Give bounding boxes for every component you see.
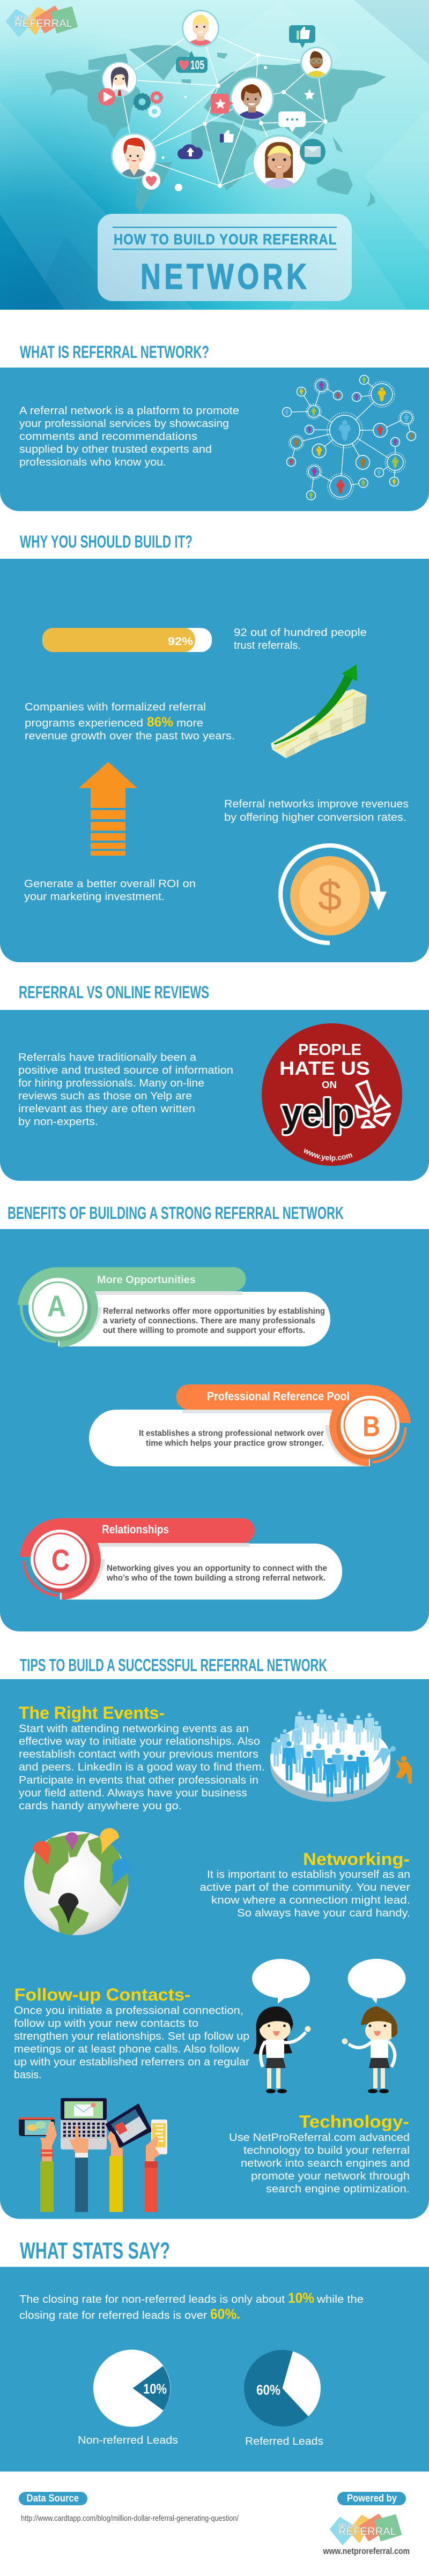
progress bar 92% <box>42 628 212 652</box>
text: 86% revenue growth: more <box>176 717 203 729</box>
tip: networking: So always have your card handy. <box>237 1907 410 1919</box>
text block <box>18 1052 233 1128</box>
icon: globe with pins <box>24 1828 132 1944</box>
tip: networking: active part of the community. You never <box>199 1882 410 1893</box>
tip: follow-up contacts: meetings or at least phone calls. Also follow <box>14 2043 240 2055</box>
icon: heart counter 105 <box>176 51 208 73</box>
tip: follow-up contacts <box>14 1985 249 2081</box>
text block: for hiring professionals. Many on-line <box>18 1077 204 1089</box>
icon: crowd on platform <box>270 1709 412 1802</box>
panel: stats <box>0 2267 429 2472</box>
world map <box>46 45 386 213</box>
network lines <box>120 28 326 186</box>
progress bar 92%: 92% <box>168 635 193 648</box>
tip: technology: search engine optimization. <box>266 2183 410 2195</box>
text: ROI <box>24 878 196 903</box>
logo: NET PRO <box>15 15 33 20</box>
data source: Data Source <box>27 2493 79 2504</box>
avatar: woman with headband <box>252 134 307 190</box>
benefit C: C <box>51 1543 70 1577</box>
icon: gears <box>134 92 162 117</box>
text: ROI: your marketing investment. <box>24 891 165 903</box>
tip: the right events: cards handy anywhere you go. <box>19 1800 182 1812</box>
benefit B <box>89 1384 411 1466</box>
text block: The closing rate for non-referred leads is only about <box>19 2294 285 2305</box>
tip: the right events: reestablish contact with your previous mentors <box>19 1749 258 1761</box>
benefit A: a variety of connections. There are many professionals <box>103 1316 315 1326</box>
tip: networking <box>199 1849 410 1919</box>
tip: follow-up contacts: basis. <box>14 2069 42 2081</box>
text block: professionals who know you. <box>19 456 166 468</box>
avatar: red-haired woman <box>111 133 157 179</box>
tip: technology: Use NetProReferral.com advanced <box>229 2132 410 2144</box>
avatar: man with glasses <box>300 47 332 79</box>
benefit A: out there willing to promote and support your efforts. <box>103 1326 305 1335</box>
panel: why build <box>0 559 429 962</box>
tip: follow-up contacts: up with your established referrers on a regular <box>14 2056 249 2068</box>
benefit C: who’s who of the town building a strong referral network. <box>106 1574 326 1583</box>
tip: technology <box>229 2112 410 2195</box>
data source: http://www.cardtapp.com/blog/million-dollar-referral-generating-question/ <box>21 2514 239 2523</box>
text block: supplied by other trusted experts and <box>19 444 212 455</box>
icon: white star <box>304 89 315 100</box>
text block: closing rate for referred leads is over <box>19 2310 207 2322</box>
tip: the right events: your field attend. Always have your business <box>19 1787 247 1799</box>
tip: the right events: The Right Events- <box>19 1703 165 1723</box>
logo: REFERRAL <box>14 18 72 29</box>
data source <box>19 2492 239 2523</box>
title box <box>98 214 352 301</box>
icon: heart counter 105: 105 <box>190 58 204 72</box>
tip: the right events: Start with attending networking events as an <box>19 1723 249 1735</box>
icon: thumbs up <box>220 130 234 143</box>
tip: technology: Technology- <box>299 2112 409 2131</box>
yelp badge: PEOPLE <box>298 1041 361 1059</box>
benefit B: Professional Reference Pool <box>207 1390 350 1403</box>
text block: A referral network is a platform to promote <box>19 405 239 417</box>
heading: why you should build it: WHY YOU SHOULD BUILD IT? <box>20 532 193 551</box>
text: conversion rates <box>224 798 409 823</box>
text block: 60%. <box>210 2306 240 2322</box>
text block: 10% <box>288 2290 314 2306</box>
benefit B: It establishes a strong professional network over <box>139 1429 324 1438</box>
tip: networking: It is important to establish yourself as an <box>207 1869 410 1881</box>
heading: what stats say: WHAT STATS SAY? <box>20 2237 170 2264</box>
text block <box>19 2290 364 2322</box>
tip: follow-up contacts: follow up with your new contacts to <box>14 2018 198 2030</box>
icon: star box <box>211 94 233 114</box>
benefit C: Networking gives you an opportunity to connect with the <box>107 1564 327 1573</box>
text: 92 out of hundred <box>234 627 367 652</box>
text: conversion rates: by offering higher conversion rates. <box>224 812 406 823</box>
footer logo <box>331 2515 401 2544</box>
pie chart: non-referred leads: 10% <box>143 2381 167 2397</box>
pie chart: referred leads <box>244 2350 323 2447</box>
powered by: www.netproreferral.com <box>323 2546 410 2556</box>
benefit A: A <box>47 1289 66 1323</box>
tip: technology: promote your network through <box>251 2170 410 2182</box>
text: 86% revenue growth: revenue growth over the past two years. <box>25 730 235 742</box>
pie chart: non-referred leads: Non-referred Leads <box>78 2435 178 2446</box>
footer logo: REFERRAL <box>338 2526 396 2537</box>
icon: money stairs with growth arrow <box>271 664 367 758</box>
text block: irrelevant as they are often written <box>18 1103 195 1115</box>
text: 86% revenue growth: 86% <box>147 715 173 730</box>
panel: referral vs reviews <box>0 1010 429 1181</box>
panel: tips <box>0 1679 429 2219</box>
benefit C <box>20 1518 342 1600</box>
logo <box>7 7 77 36</box>
network nodes <box>162 53 328 191</box>
tip: follow-up contacts: Once you initiate a professional connection, <box>14 2005 243 2017</box>
illustration: hands holding devices <box>19 2098 167 2212</box>
tip: networking: Networking- <box>303 1849 410 1869</box>
text: 92 out of hundred: trust referrals. <box>234 640 301 652</box>
title box: HOW TO BUILD YOUR REFERRAL <box>114 230 337 248</box>
text block: by non-experts. <box>18 1116 98 1128</box>
text block <box>19 405 239 468</box>
icon: orange up arrow <box>78 762 137 856</box>
title box: NETWORK <box>140 257 310 296</box>
icon: thumbs up bubble <box>289 25 315 48</box>
yelp badge: yelp <box>282 1092 354 1135</box>
icon: heart badge <box>142 171 160 190</box>
tip: technology: network into search engines and <box>241 2158 410 2169</box>
pie chart: referred leads: Referred Leads <box>245 2436 323 2447</box>
tip: the right events: and peers. LinkedIn is a good way to find them. <box>19 1762 265 1773</box>
yelp badge <box>262 1023 402 1166</box>
tip: the right events: effective way to initiate your relationships. Also <box>19 1736 260 1748</box>
tip: the right events <box>19 1703 265 1812</box>
text block: Referrals have traditionally been a <box>18 1052 197 1064</box>
text block: positive and trusted source of information <box>18 1065 233 1076</box>
yelp badge: ON <box>322 1080 337 1090</box>
yelp badge: www.yelp.com <box>304 1149 353 1162</box>
heading: what is referral network: WHAT IS REFERRAL NETWORK? <box>20 342 209 362</box>
tip: technology: technology to build your referral <box>243 2145 410 2156</box>
powered by <box>323 2492 410 2556</box>
pie chart: referred leads: 60% <box>256 2382 280 2398</box>
text: conversion rates: Referral networks improve revenues <box>224 798 409 810</box>
panel: benefits <box>0 1229 429 1631</box>
avatar: brown-haired man <box>230 77 274 121</box>
woman right <box>342 2006 397 2093</box>
heading: referral vs online reviews: REFERRAL VS ONLINE REVIEWS <box>19 983 209 1002</box>
tip: the right events: Participate in events that other professionals in <box>19 1774 258 1786</box>
avatar: dark-haired man <box>102 62 137 98</box>
yelp badge: HATE US <box>279 1058 370 1079</box>
text: ROI: Generate a better overall ROI on <box>24 878 196 890</box>
benefit A <box>18 1267 330 1347</box>
panel: hero header <box>0 0 429 310</box>
speech bubble right <box>347 1959 405 2004</box>
benefit B: B <box>363 1410 380 1442</box>
illustration: two women talking <box>252 1959 405 2093</box>
speech bubble left <box>252 1959 310 2004</box>
avatar: blond man <box>182 10 219 48</box>
benefit C: Relationships <box>102 1523 169 1536</box>
text block: reviews such as those on Yelp are <box>18 1090 192 1102</box>
powered by: Powered by <box>347 2493 397 2504</box>
pie chart: non-referred leads <box>78 2350 178 2446</box>
tip: networking: know where a connection might lead. <box>211 1894 410 1906</box>
text block: your professional services by showcasing <box>19 418 229 430</box>
icon: dollar coin with circular arrow: $ <box>318 872 342 919</box>
icon: chat bubble <box>278 111 306 132</box>
benefit B: time which helps your practice grow stronger. <box>146 1439 324 1448</box>
text: 86% revenue growth <box>25 701 235 742</box>
woman left <box>253 2006 311 2093</box>
footer logo: NET PRO <box>339 2523 357 2528</box>
text: 86% revenue growth: Companies with formalized referral <box>25 701 206 713</box>
icon: envelope <box>300 139 326 164</box>
benefit A: Referral networks offer more opportunities by establishing <box>103 1307 325 1316</box>
icon: play button <box>98 88 116 106</box>
text: 86% revenue growth: programs experienced <box>25 717 143 729</box>
tip: follow-up contacts: strengthen your relationships. Set up follow up <box>14 2031 249 2042</box>
icon: cloud upload <box>177 144 203 159</box>
tip: follow-up contacts: Follow-up Contacts- <box>14 1985 191 2004</box>
network diagram <box>282 375 416 500</box>
panel: what is referral network <box>0 368 429 511</box>
text block: while the <box>316 2294 364 2305</box>
benefit A: More Opportunities <box>97 1274 196 1286</box>
text block: comments and recommendations <box>19 431 197 443</box>
text: 92 out of hundred: 92 out of hundred people <box>234 627 367 639</box>
icon: dollar coin with circular arrow <box>280 845 387 943</box>
